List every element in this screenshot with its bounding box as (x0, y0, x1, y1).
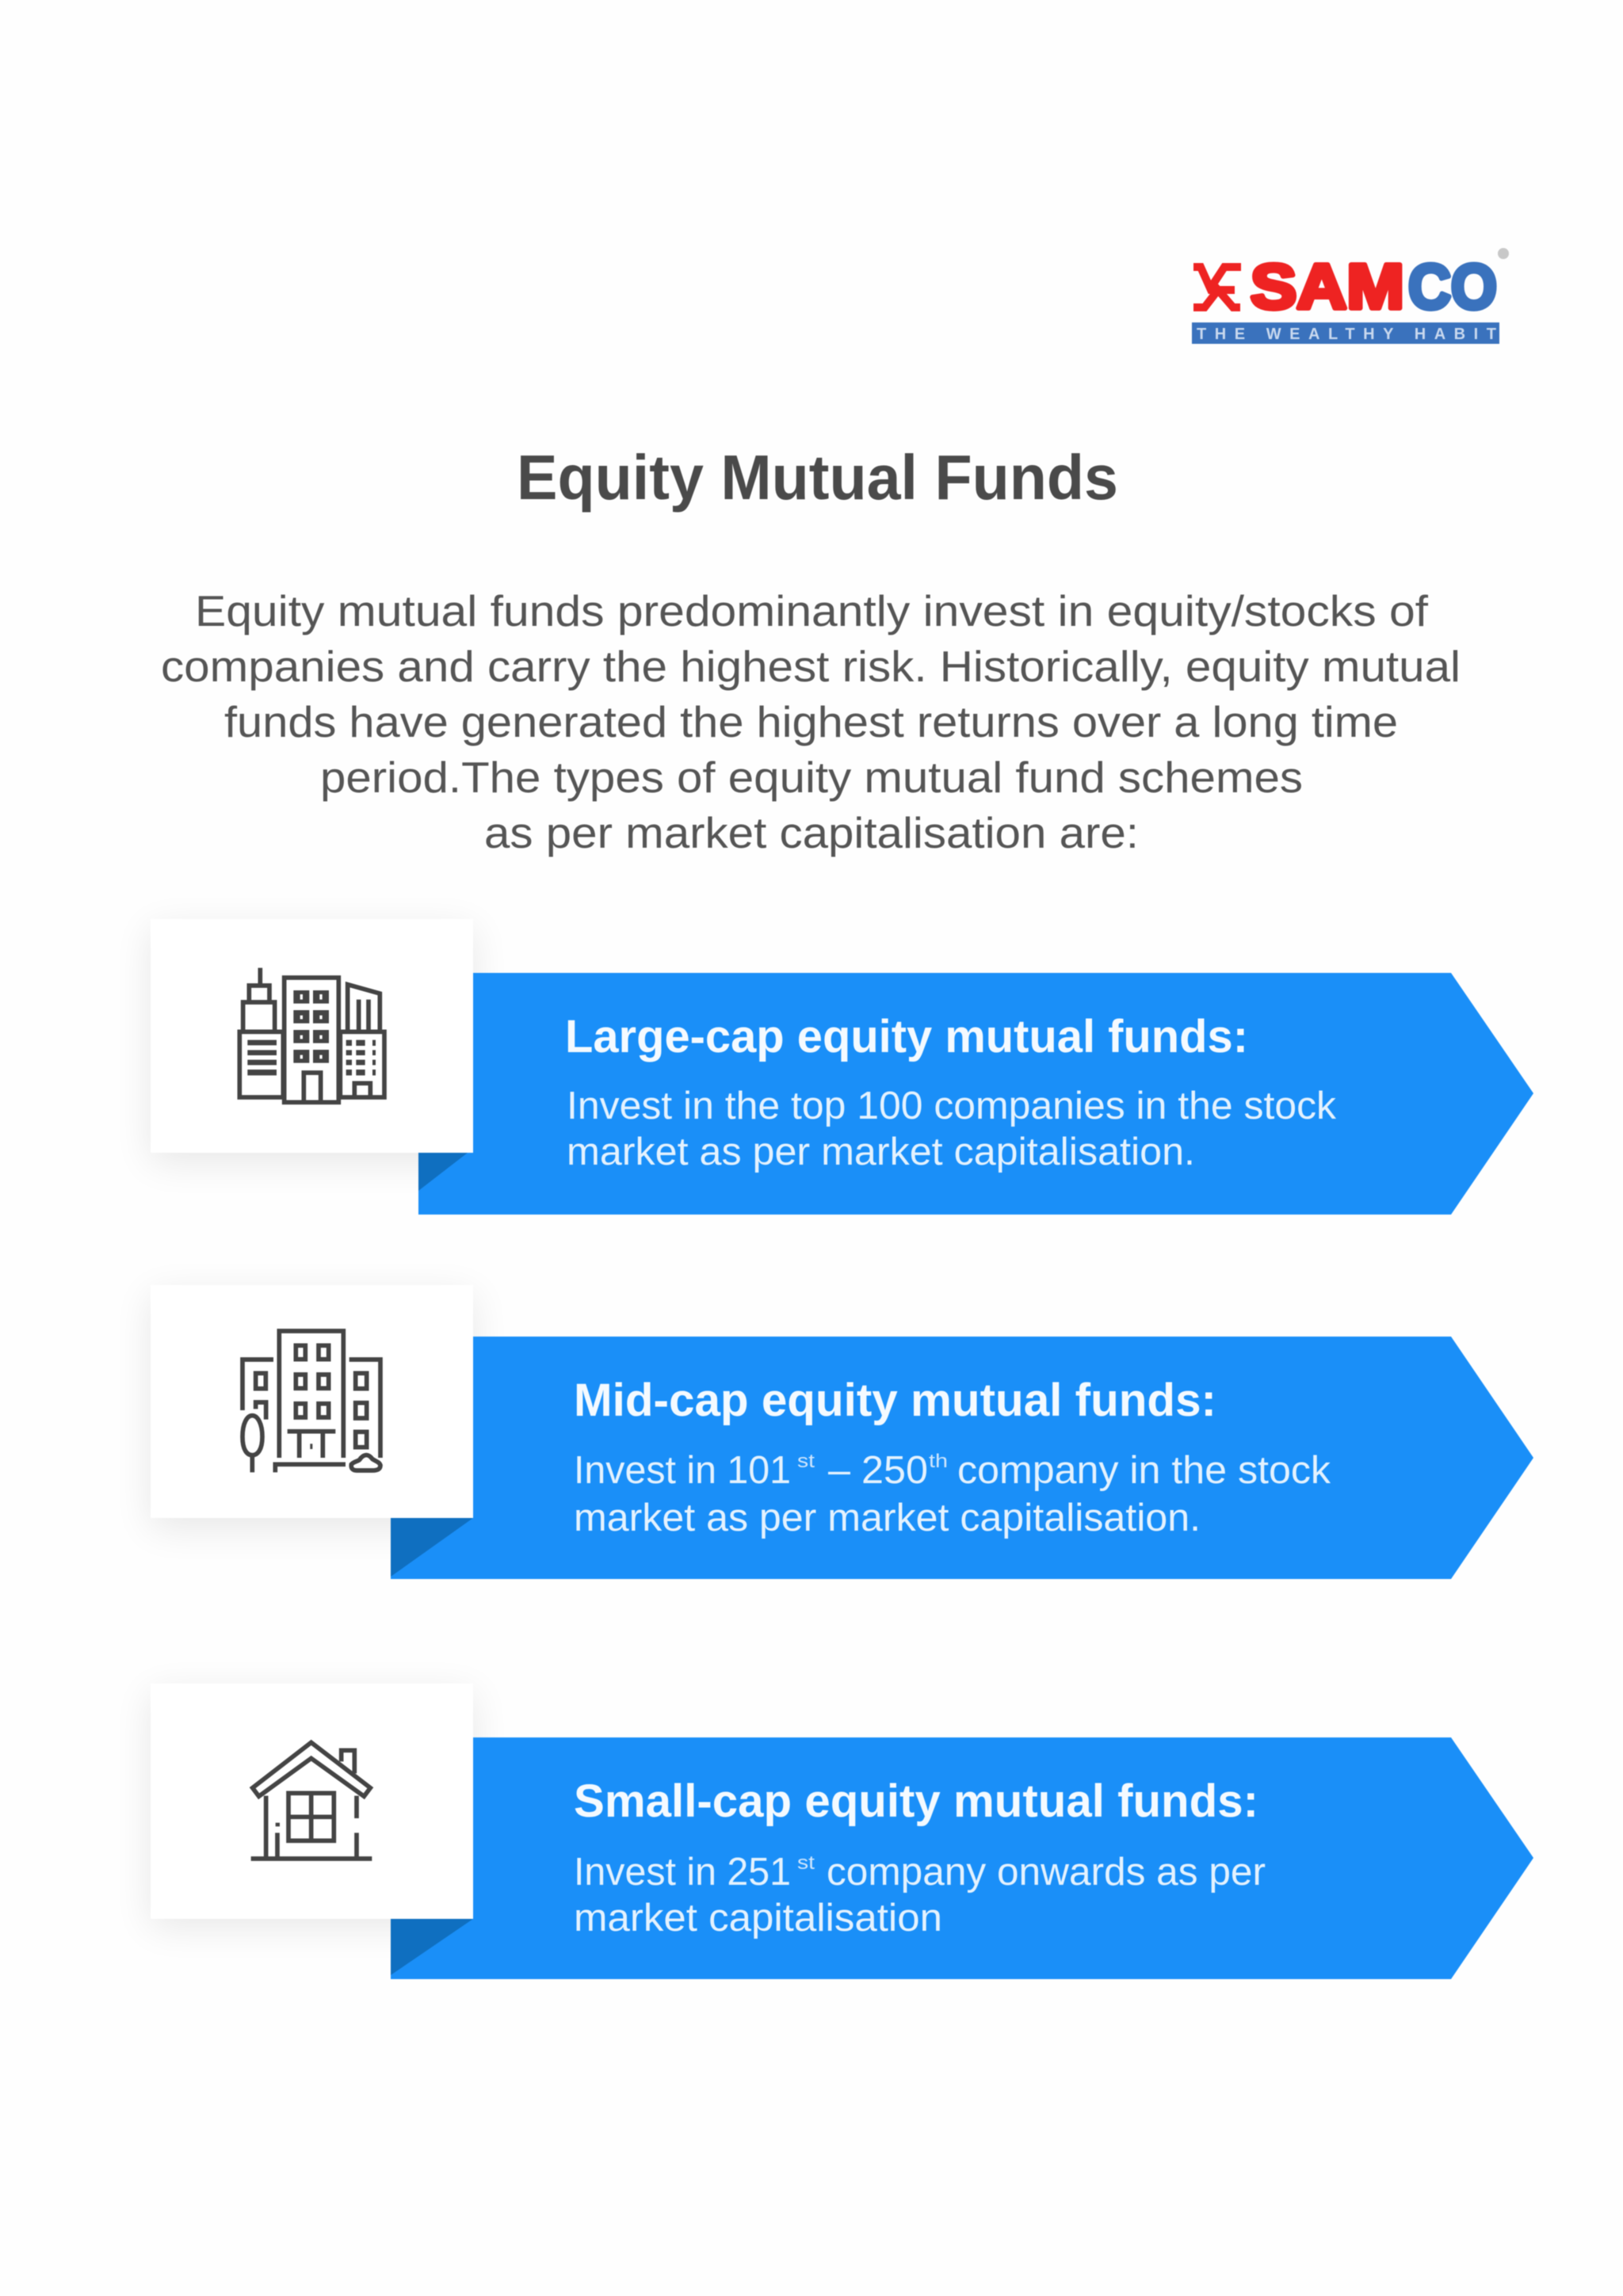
logo: SAMCO (1192, 248, 1509, 344)
logo wordmark: SAM (1251, 251, 1404, 322)
icon card (151, 1285, 473, 1518)
logo tagline: THE WEALTHY HABIT (1197, 326, 1496, 343)
logo tagline band (1192, 322, 1499, 344)
mid-cap description: th (929, 1451, 948, 1472)
folded corner (391, 1518, 473, 1577)
icon: city buildings (239, 968, 384, 1102)
large-cap heading: Large-cap equity mutual funds: (565, 1011, 1248, 1062)
folded corner (418, 1153, 468, 1191)
small-cap heading: Small-cap equity mutual funds: (574, 1775, 1258, 1827)
small-cap description: company onwards as per (827, 1851, 1266, 1894)
mid-cap description: Invest in 101 (574, 1449, 791, 1492)
mid-cap description: – 250 (828, 1449, 928, 1492)
logo wordmark: CO (1408, 251, 1497, 322)
blue arrow banner (391, 1337, 1533, 1579)
panel: mid-cap (151, 1285, 1533, 1579)
title: Equity Mutual Funds (517, 442, 1118, 513)
mid-cap description: company in the stock (957, 1449, 1331, 1492)
blue arrow banner (391, 1737, 1533, 1979)
intro text block (161, 586, 1461, 857)
mid-cap heading: Mid-cap equity mutual funds: (574, 1375, 1216, 1426)
blue arrow banner (418, 973, 1533, 1215)
large-cap description (567, 1085, 1336, 1173)
folded corner (391, 1919, 473, 1975)
intro text block: period.The types of equity mutual fund schemes (320, 753, 1303, 802)
icon: mid-size office (242, 1331, 380, 1472)
intro text block: companies and carry the highest risk. Historically, equity mutual (161, 642, 1461, 691)
small-cap description: st (797, 1852, 815, 1874)
icon card (151, 1684, 473, 1919)
large-cap description: Invest in the top 100 companies in the stock (567, 1085, 1336, 1127)
intro text block: as per market capitalisation are: (484, 808, 1139, 857)
icon: small house (251, 1742, 372, 1859)
panel: large-cap (151, 919, 1533, 1215)
intro text block: Equity mutual funds predominantly invest in equity/stocks of (195, 586, 1429, 635)
mid-cap description: market as per market capitalisation. (574, 1497, 1201, 1539)
large-cap description: market as per market capitalisation. (567, 1131, 1195, 1173)
small-cap description: Invest in 251 (574, 1851, 791, 1894)
small-cap description: market capitalisation (574, 1897, 942, 1939)
small-cap description (574, 1851, 1266, 1939)
mid-cap description: st (797, 1451, 815, 1472)
icon card (151, 919, 473, 1153)
logo registered mark (1498, 248, 1509, 259)
intro text block: funds have generated the highest returns over a long time (224, 697, 1398, 746)
panel: small-cap (151, 1684, 1533, 1979)
icon: logo symbol (1193, 267, 1241, 307)
mid-cap description (574, 1449, 1331, 1539)
